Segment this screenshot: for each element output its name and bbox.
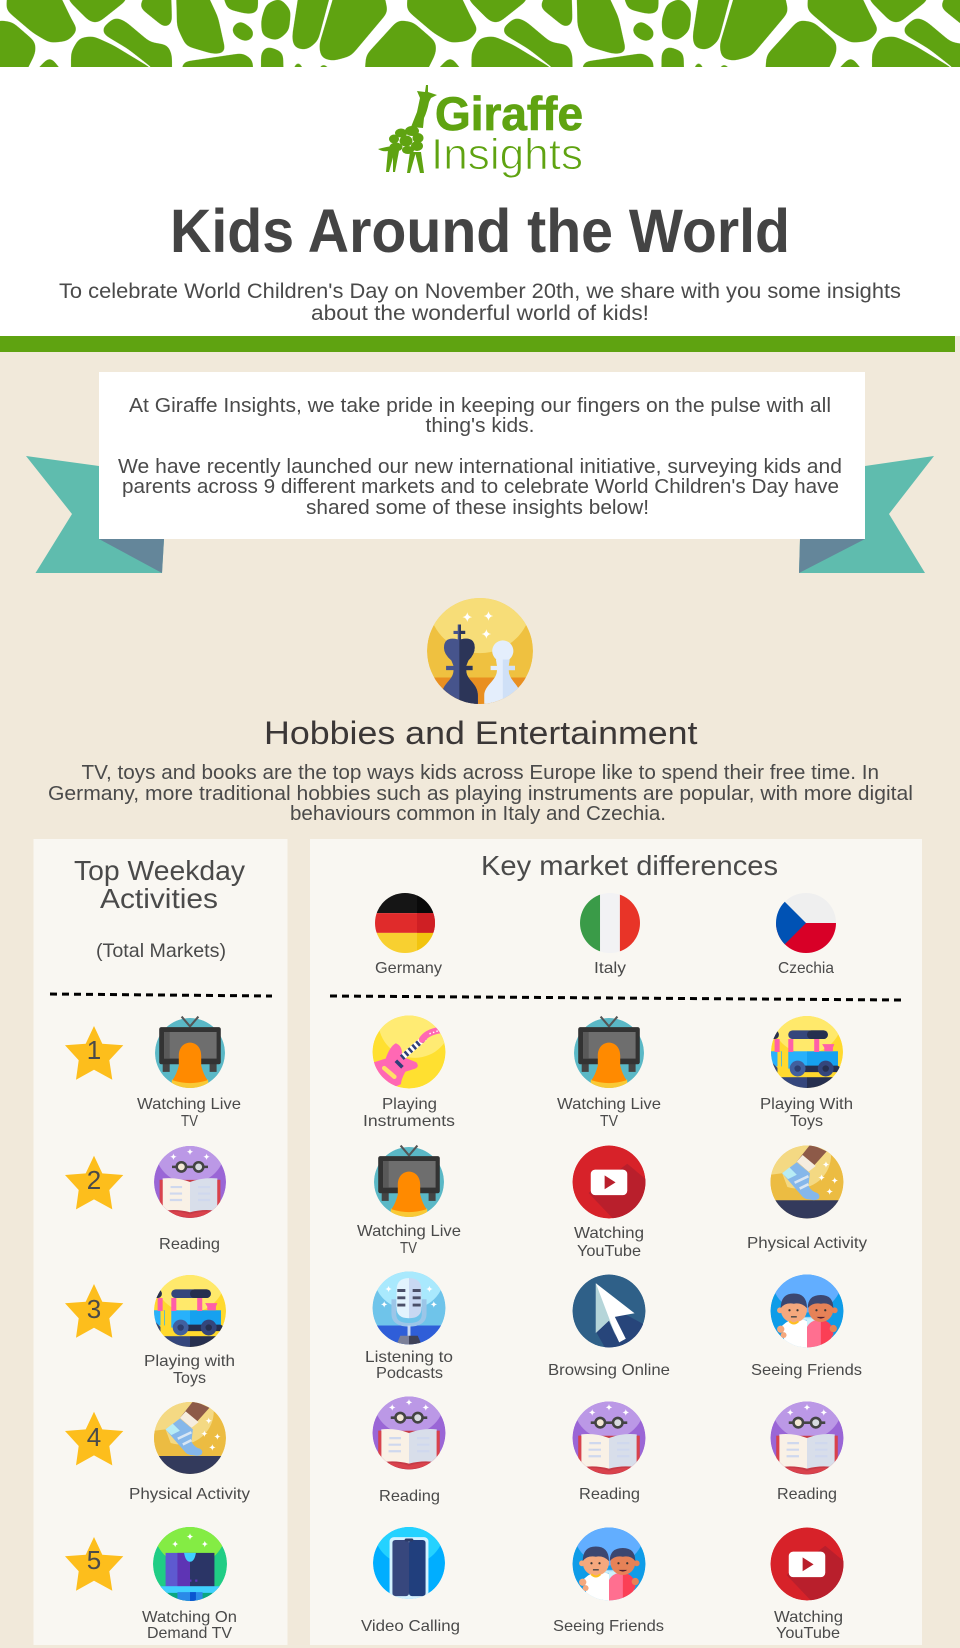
Germany: watching live TV bbox=[357, 1146, 461, 1257]
rank 3: playing with toys: Playing with bbox=[144, 1353, 235, 1370]
ribbon banner bbox=[26, 372, 934, 573]
rank 1: watching live TV: Watching Live bbox=[137, 1096, 241, 1113]
flag: Italy: Italy bbox=[594, 960, 626, 977]
icon: chess pieces bbox=[427, 598, 533, 704]
intro paragraph: Germany, more traditional hobbies such as playing instruments are popular, with more digital bbox=[48, 783, 913, 805]
header panel bbox=[0, 0, 960, 336]
rank 4: physical activity: 4 bbox=[87, 1422, 101, 1452]
Germany: playing instruments: Instruments bbox=[363, 1113, 455, 1130]
rank 3: playing with toys bbox=[65, 1242, 235, 1387]
intro paragraph: behaviours common in Italy and Czechia. bbox=[290, 803, 666, 825]
Italy: browsing online: Browsing Online bbox=[548, 1362, 670, 1379]
Italy: browsing online bbox=[548, 1274, 670, 1379]
Italy: watching live TV bbox=[557, 1017, 661, 1130]
rank 3: playing with toys: Toys bbox=[173, 1370, 206, 1387]
rank 4: physical activity bbox=[65, 1378, 250, 1503]
Italy: watching live TV: TV bbox=[600, 1113, 618, 1130]
Czechia: watching YouTube: YouTube bbox=[776, 1625, 840, 1642]
rank 2: reading bbox=[65, 1113, 226, 1253]
logo wordmark Insights: Insights bbox=[431, 130, 583, 179]
rank 3: playing with toys: 3 bbox=[87, 1294, 101, 1324]
giraffe skin pattern band bbox=[0, 0, 960, 67]
Czechia: watching YouTube bbox=[770, 1528, 847, 1642]
intro text box: parents across 9 different markets and to celebrate World Children's Day have bbox=[122, 476, 839, 498]
Italy: watching YouTube: Watching bbox=[574, 1225, 644, 1242]
rank 1: watching live TV bbox=[65, 1017, 241, 1130]
Czechia: playing with toys: Playing With bbox=[760, 1096, 853, 1113]
Germany: reading: Reading bbox=[379, 1488, 440, 1505]
heading: Hobbies and Entertainment: Hobbies and Entertainment bbox=[264, 715, 698, 751]
Germany: playing instruments bbox=[363, 985, 455, 1130]
rank 1: watching live TV: 1 bbox=[87, 1035, 101, 1065]
ribbon left tail bbox=[26, 456, 164, 573]
Czechia: physical activity: Physical Activity bbox=[747, 1235, 867, 1252]
intro text box: At Giraffe Insights, we take pride in keeping our fingers on the pulse with all bbox=[129, 395, 831, 417]
Italy: reading: Reading bbox=[579, 1486, 640, 1503]
subtitle: To celebrate World Children's Day on November 20th, we share with you some insights bbox=[59, 280, 901, 303]
Germany: watching live TV: TV bbox=[400, 1240, 417, 1257]
Czechia: reading: Reading bbox=[777, 1486, 837, 1503]
intro text box: We have recently launched our new international initiative, surveying kids and bbox=[118, 456, 842, 478]
Czechia: physical activity bbox=[747, 1121, 867, 1252]
Italy: seeing friends bbox=[553, 1494, 664, 1635]
flag: Italy bbox=[580, 893, 640, 977]
green divider bar bbox=[0, 336, 955, 352]
Italy: watching YouTube: YouTube bbox=[577, 1243, 641, 1260]
panel heading: Key market differences bbox=[481, 850, 778, 881]
intro text box: shared some of these insights below! bbox=[306, 497, 649, 519]
Czechia: watching YouTube: Watching bbox=[774, 1609, 843, 1626]
Italy: seeing friends: Seeing Friends bbox=[553, 1618, 664, 1635]
Czechia: seeing friends: Seeing Friends bbox=[751, 1362, 862, 1379]
Germany: video calling bbox=[361, 1494, 460, 1635]
ribbon right tail bbox=[799, 456, 934, 573]
rank 5: watching on demand TV: Demand TV bbox=[147, 1625, 232, 1642]
Germany: reading bbox=[372, 1363, 446, 1505]
Germany: listening to podcasts bbox=[365, 1238, 453, 1382]
rank 2: reading: Reading bbox=[159, 1236, 220, 1253]
logo: Giraffe Insights bbox=[378, 85, 583, 179]
Czechia: seeing friends bbox=[751, 1241, 862, 1379]
flag: Germany: Germany bbox=[375, 960, 442, 977]
panel heading: Top Weekday bbox=[74, 855, 245, 886]
panel: key market differences bbox=[310, 839, 922, 1645]
panel heading: Activities bbox=[100, 883, 218, 914]
Italy: watching YouTube bbox=[572, 1146, 649, 1260]
rank 1: watching live TV: TV bbox=[181, 1113, 198, 1130]
rank 2: reading: 2 bbox=[87, 1165, 101, 1195]
Germany: listening to podcasts: Podcasts bbox=[376, 1365, 443, 1382]
panel: top weekday activities bbox=[34, 839, 288, 1645]
Italy: reading bbox=[572, 1368, 646, 1503]
panel heading: (Total Markets) bbox=[96, 940, 226, 962]
intro paragraph: TV, toys and books are the top ways kids across Europe like to spend their free time. In bbox=[82, 762, 879, 784]
title: Kids Around the World bbox=[170, 197, 790, 265]
subtitle bbox=[59, 280, 901, 325]
Czechia: playing with toys: Toys bbox=[790, 1113, 823, 1130]
intro text box bbox=[99, 372, 865, 539]
Czechia: playing with toys bbox=[760, 983, 853, 1130]
Italy: watching live TV: Watching Live bbox=[557, 1096, 661, 1113]
flag: Germany bbox=[375, 893, 442, 977]
Czechia: reading bbox=[770, 1368, 844, 1503]
Germany: playing instruments: Playing bbox=[382, 1096, 437, 1113]
rank 4: physical activity: Physical Activity bbox=[129, 1486, 250, 1503]
Germany: video calling: Video Calling bbox=[361, 1618, 460, 1635]
icon: giraffe bbox=[378, 85, 437, 173]
intro paragraph bbox=[48, 762, 913, 825]
Germany: watching live TV: Watching Live bbox=[357, 1223, 461, 1240]
flag: Czechia bbox=[776, 893, 836, 977]
intro text box: thing's kids. bbox=[426, 415, 534, 437]
subtitle: about the wonderful world of kids! bbox=[311, 302, 649, 325]
rank 5: watching on demand TV: 5 bbox=[87, 1545, 101, 1575]
Germany: listening to podcasts: Listening to bbox=[365, 1349, 453, 1366]
rank 5: watching on demand TV bbox=[65, 1493, 237, 1642]
rank 5: watching on demand TV: Watching On bbox=[142, 1609, 237, 1626]
flag: Czechia: Czechia bbox=[778, 960, 834, 977]
logo wordmark Giraffe: Giraffe bbox=[435, 87, 583, 140]
panel heading bbox=[74, 855, 245, 962]
